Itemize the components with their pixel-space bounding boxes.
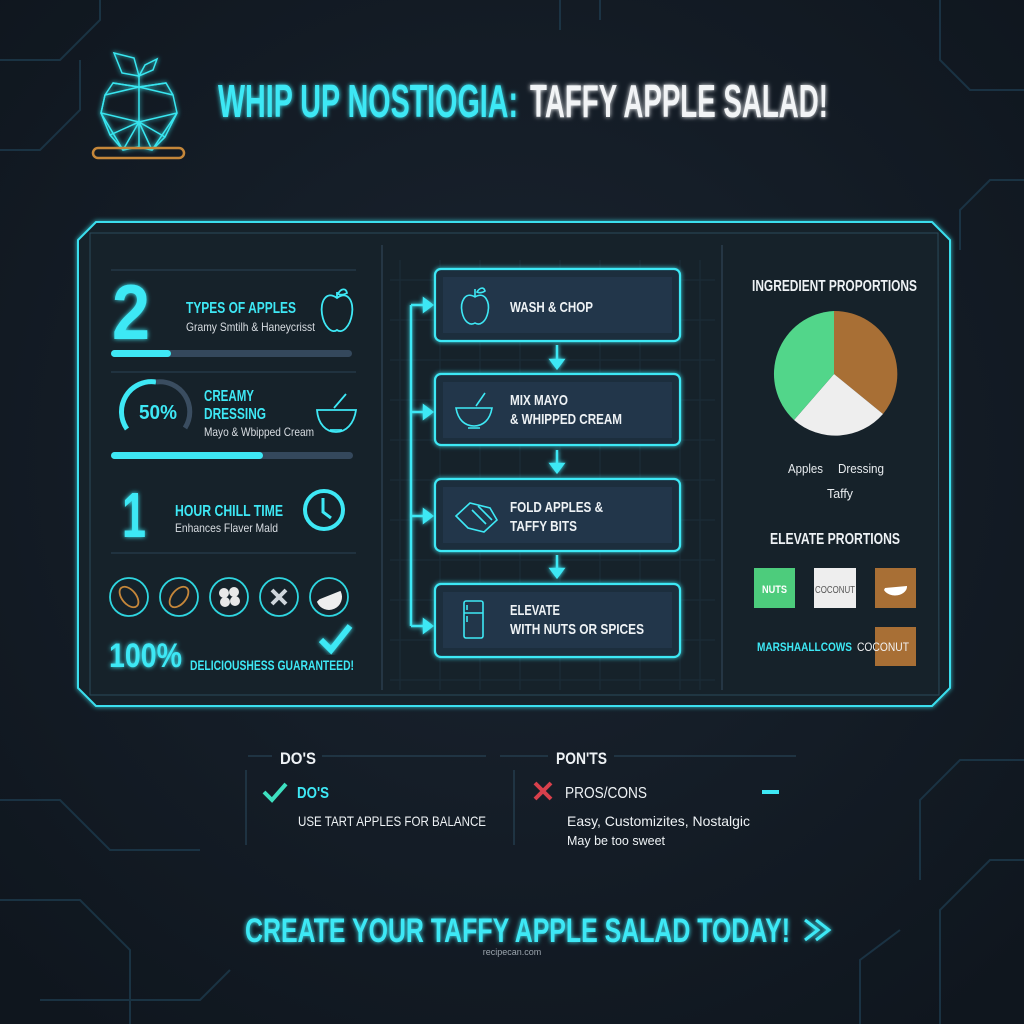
panel: don'ts / pros-cons: Easy, Customizites, Nostalgic bbox=[567, 813, 750, 829]
panel: don'ts / pros-cons: PON'TS bbox=[556, 749, 607, 768]
heading: elevate proportions: ELEVATE PRORTIONS bbox=[770, 531, 900, 548]
stat: creamy dressing: CREAMY bbox=[204, 388, 254, 405]
legend: pie labels: Apples bbox=[788, 461, 823, 476]
panel: do's: DO'S bbox=[280, 749, 316, 768]
step 1: wash & chop bbox=[435, 269, 680, 341]
stat: creamy dressing: Mayo & Wbipped Cream bbox=[204, 425, 314, 439]
panel: do's: DO'S bbox=[297, 785, 329, 802]
stat: creamy dressing bbox=[111, 372, 356, 459]
icon: apple stand bbox=[93, 148, 184, 158]
title: TAFFY APPLE SALAD! bbox=[530, 75, 828, 127]
tiles: add-ins: MARSHAALLCOWS bbox=[757, 640, 852, 654]
text: 100% deliciousness guaranteed: 100% bbox=[109, 637, 182, 675]
step 4: elevate bbox=[435, 584, 680, 657]
step 2: mix mayo: & WHIPPED CREAM bbox=[510, 411, 622, 428]
step 3: fold apples: TAFFY BITS bbox=[510, 518, 577, 535]
legend: pie labels: Dressing bbox=[838, 461, 884, 476]
panel: do's bbox=[246, 749, 486, 845]
stat: 2 types of apples: 2 bbox=[112, 268, 150, 356]
step 1: wash & chop: WASH & CHOP bbox=[510, 299, 593, 316]
stat: 1 hour chill time: 1 bbox=[122, 479, 146, 551]
icons: mix-in circles bbox=[110, 578, 348, 616]
step 4: elevate: ELEVATE bbox=[510, 602, 560, 619]
footer credit: recipecan.com bbox=[483, 947, 541, 957]
text: 100% deliciousness guaranteed bbox=[109, 626, 354, 675]
tiles: add-ins: NUTS bbox=[762, 584, 787, 596]
title: WHIP UP NOSTIOGIA: bbox=[218, 75, 518, 127]
stat: 1 hour chill time: HOUR CHILL TIME bbox=[175, 503, 283, 520]
stat: 2 types of apples: Gramy Smtilh & Haneycrisst bbox=[186, 320, 316, 334]
legend: pie labels: Taffy bbox=[827, 486, 853, 501]
tiles: add-ins: COCONUT bbox=[857, 640, 910, 654]
arrow: flow connector bbox=[411, 299, 563, 632]
stat: 1 hour chill time: Enhances Flaver Mald bbox=[175, 521, 278, 535]
panel: don'ts / pros-cons: May be too sweet bbox=[567, 833, 665, 848]
panel: main dashboard bbox=[78, 222, 950, 706]
step 3: fold apples: FOLD APPLES & bbox=[510, 499, 603, 516]
stat: 2 types of apples bbox=[111, 268, 356, 357]
heading: ingredient proportions: INGREDIENT PROPORTIONS bbox=[752, 278, 917, 295]
legend: pie labels bbox=[788, 461, 884, 501]
pie chart bbox=[774, 311, 897, 436]
stat: 2 types of apples: TYPES OF APPLES bbox=[186, 300, 296, 317]
icon: wireframe apple bbox=[101, 53, 177, 150]
step 2: mix mayo bbox=[435, 374, 680, 445]
panel: don'ts / pros-cons: PROS/CONS bbox=[565, 785, 647, 802]
step 3: fold apples bbox=[435, 479, 680, 551]
stat: 1 hour chill time bbox=[111, 479, 356, 553]
text: 100% deliciousness guaranteed: DELICIOUSHESS GUARANTEED! bbox=[190, 657, 354, 673]
stat: creamy dressing: 50% bbox=[139, 402, 177, 424]
step 4: elevate: WITH NUTS OR SPICES bbox=[510, 621, 644, 638]
panel: don'ts / pros-cons bbox=[500, 749, 796, 848]
stat: creamy dressing: DRESSING bbox=[204, 406, 266, 423]
call to action: CREATE YOUR TAFFY APPLE SALAD TODAY! bbox=[245, 912, 790, 950]
tiles: add-ins: COCONUT bbox=[815, 585, 855, 596]
tiles: add-ins bbox=[754, 568, 916, 666]
step 2: mix mayo: MIX MAYO bbox=[510, 392, 568, 409]
panel: do's: USE TART APPLES FOR BALANCE bbox=[298, 813, 486, 829]
